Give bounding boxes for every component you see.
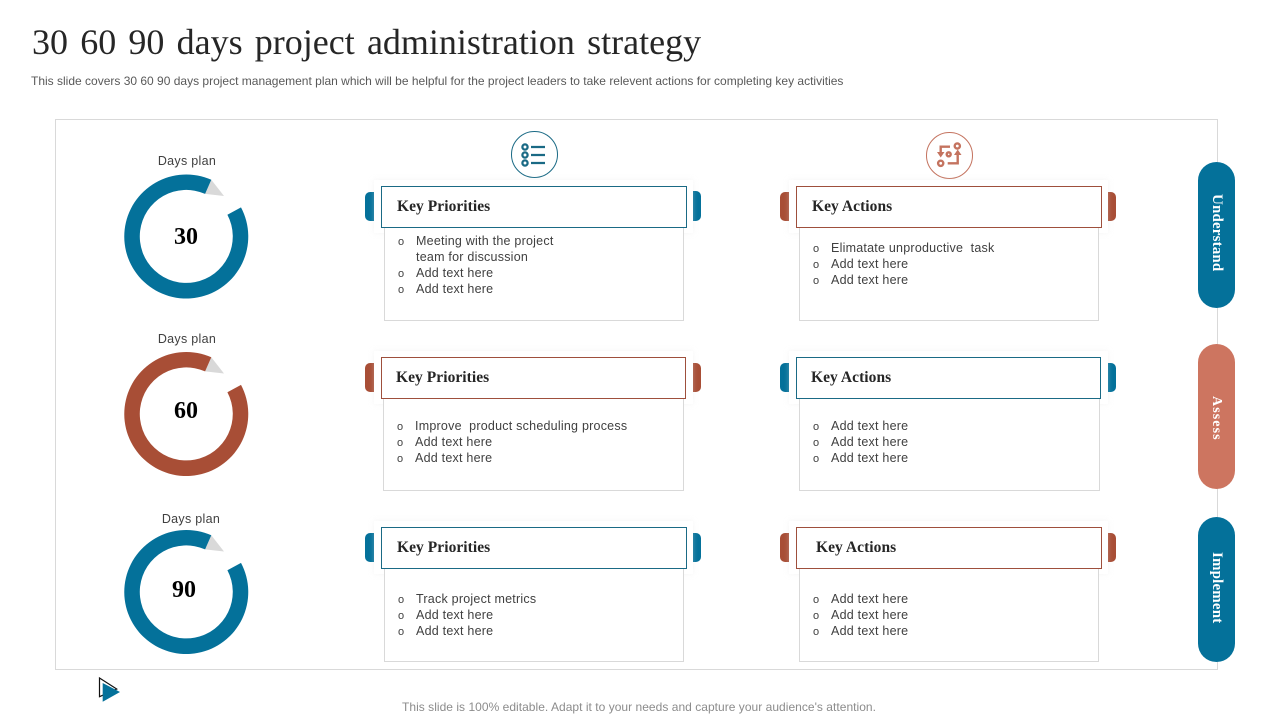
card: priorities row 3	[365, 527, 701, 662]
bullet list: Meeting with the project team for discussion Add text here Add text here	[416, 234, 554, 296]
right tab	[689, 533, 701, 562]
label: days plan 60: Days plan	[158, 332, 216, 346]
bullet list: o	[813, 259, 819, 271]
left tab	[365, 363, 376, 392]
bullet list: o	[398, 268, 404, 280]
bullet list: Track project metrics Add text here Add text here	[416, 592, 536, 638]
title: 30 60 90 days project administration strategy	[32, 22, 701, 62]
label: days plan 30: Days plan	[158, 154, 216, 168]
right tab	[689, 191, 701, 221]
pill: Assess	[1198, 344, 1235, 489]
card: actions row 1	[780, 178, 1116, 321]
number 90: 90	[172, 577, 196, 603]
bullet list: o	[813, 453, 819, 465]
left tab	[780, 363, 792, 392]
right tab	[1104, 533, 1116, 562]
card: priorities row 2	[365, 357, 701, 491]
left tab	[365, 533, 377, 562]
bullet list: o	[813, 243, 819, 255]
bullet list: Improve product scheduling process Add text here Add text here	[415, 419, 627, 465]
bullet list: o	[813, 594, 819, 606]
body box	[799, 557, 1099, 662]
bullet list: o	[813, 275, 819, 287]
header	[796, 357, 1101, 399]
number 30: 30	[174, 224, 198, 250]
header	[381, 186, 687, 228]
pill: Understand: Understand	[1209, 194, 1225, 272]
left tab	[780, 533, 792, 562]
header: Key Priorities	[397, 539, 490, 556]
pill: Assess: Assess	[1209, 396, 1224, 441]
body box	[383, 387, 684, 491]
bullet list: o	[813, 610, 819, 622]
body box	[384, 557, 684, 662]
bullet list: o	[398, 626, 404, 638]
bullet list: o	[397, 437, 403, 449]
header: Key Actions	[811, 369, 891, 386]
subtitle: This slide covers 30 60 90 days project management plan which will be helpful for the project leaders to take relevent actions for completing key activities	[31, 74, 843, 88]
bullet list: o	[397, 421, 403, 433]
header: Key Actions	[816, 539, 896, 556]
pill: Implement	[1198, 517, 1235, 662]
left tab	[365, 192, 377, 221]
bullet list: o	[398, 284, 404, 296]
header	[381, 357, 686, 399]
bullet list: o	[813, 626, 819, 638]
right tab	[1104, 192, 1116, 221]
number 60: 60	[174, 398, 198, 424]
header: Key Actions	[812, 198, 892, 215]
card: actions row 3	[780, 527, 1116, 662]
bullet list: Elimatate unproductive task Add text here Add text here	[831, 241, 994, 287]
pill: Understand	[1198, 162, 1235, 308]
header: Key Priorities	[397, 198, 490, 215]
bullet list: Add text here Add text here Add text here	[831, 419, 908, 465]
label: days plan 90: Days plan	[162, 512, 220, 526]
pill: Implement: Implement	[1209, 552, 1225, 623]
header: Key Priorities	[396, 369, 489, 386]
bullet list: o	[398, 594, 404, 606]
left tab	[780, 192, 792, 221]
bullet list: o	[813, 437, 819, 449]
right tab	[689, 363, 701, 392]
header	[381, 527, 687, 569]
bullet list: o	[397, 453, 403, 465]
main frame panel	[55, 119, 1218, 670]
body box	[799, 387, 1100, 491]
body box	[799, 216, 1099, 321]
bullet list: Add text here Add text here Add text here	[831, 592, 908, 638]
card: actions row 2	[780, 357, 1116, 491]
footer note: This slide is 100% editable. Adapt it to your needs and capture your audience's attention.	[402, 700, 876, 714]
bullet list: o	[813, 421, 819, 433]
header	[796, 527, 1102, 569]
card: priorities row 1	[365, 177, 701, 321]
body box	[384, 216, 684, 321]
header	[796, 186, 1102, 228]
bullet list: o	[398, 610, 404, 622]
bullet list: o	[398, 236, 404, 248]
right tab	[1104, 363, 1116, 392]
